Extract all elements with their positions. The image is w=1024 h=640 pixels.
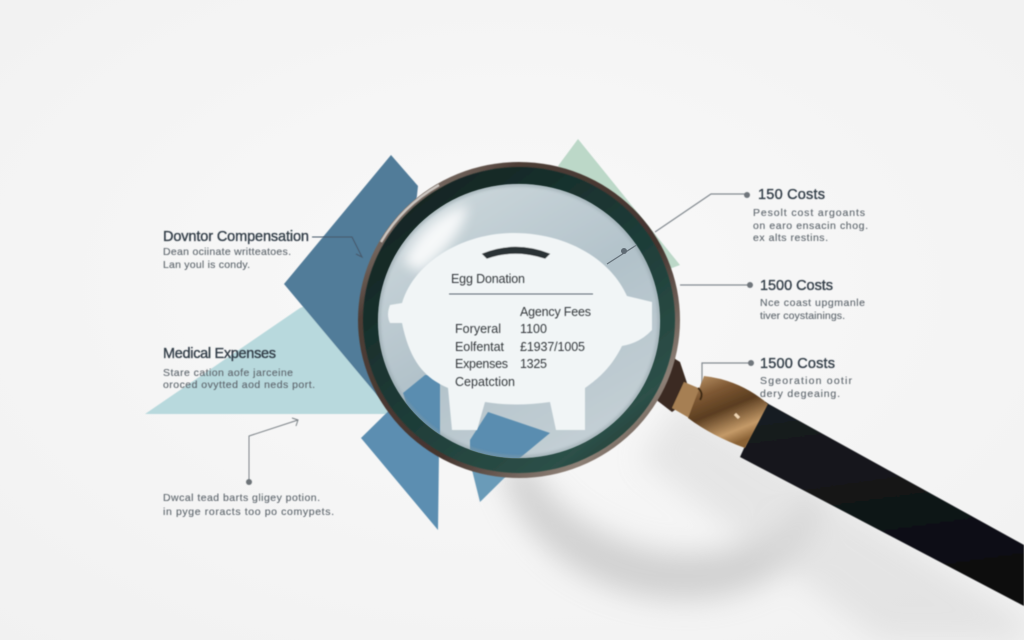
magnifying lens: [358, 162, 680, 478]
table: cost rows: Agency Fees: [520, 305, 591, 319]
outer rim: [358, 162, 680, 478]
highlight: [403, 205, 468, 272]
geometric shapes: [145, 139, 680, 530]
callout: 1500 costs middle: tiver coystainings.: [760, 310, 845, 322]
refracted leader line: [606, 245, 636, 264]
callout: 1500 costs lower: dery degeaing.: [760, 388, 840, 400]
table: cost rows: Eolfentat: [455, 340, 505, 354]
callout: donor compensation: [163, 229, 362, 271]
callout: 150 costs: ex alts restins.: [753, 232, 828, 244]
handle grip: [740, 402, 1024, 606]
refracted shapes: [402, 374, 440, 434]
callout: donor compensation: Dean ociinate writteatoes.: [163, 246, 291, 258]
callout: bottom note: [163, 418, 334, 518]
shape: green triangle: [558, 139, 680, 280]
callout: medical expenses: Stare cation aofe jarceine: [163, 367, 293, 379]
table: cost rows: £1937/1005: [520, 340, 585, 354]
lens label text: [449, 272, 593, 389]
callout: donor compensation: Lan youl is condy.: [163, 259, 250, 271]
callout: donor compensation: Dovntor Compensation: [163, 229, 309, 245]
callout: 1500 costs lower: [702, 356, 852, 400]
pale rim highlight: [381, 185, 439, 242]
callout: 150 costs: on earo ensacin chog.: [753, 220, 868, 232]
table: cost rows: 1100: [520, 322, 547, 336]
callouts left: [163, 229, 362, 518]
callout: 150 costs: [655, 187, 868, 244]
callout: medical expenses: [163, 346, 315, 391]
callout: bottom note: in pyge roracts too po comypets.: [163, 506, 334, 518]
callout: bottom note: Dwcal tead barts gligey potion.: [163, 492, 320, 504]
brass ferrule: [650, 352, 768, 448]
magnifying glass handle: [650, 352, 1024, 606]
glass: [378, 184, 660, 458]
table: cost rows: Foryeral: [455, 322, 501, 336]
inner edge shadow: [379, 185, 659, 457]
callout: 1500 costs middle: Nce coast upgmanle: [760, 297, 865, 309]
shape: dark blue diamond: [284, 155, 418, 407]
table: cost rows: Cepatction: [455, 375, 515, 389]
table: cost rows: [455, 305, 591, 389]
callout: 150 costs: Pesolt cost argoants: [753, 207, 865, 219]
callout: 150 costs: 150 Costs: [758, 187, 825, 203]
lens cast shadow: [500, 400, 1024, 640]
callout: 1500 costs middle: [680, 278, 865, 322]
callout: 1500 costs lower: 1500 Costs: [760, 356, 835, 372]
shape: light teal triangle: [145, 300, 400, 414]
callout: medical expenses: Medical Expenses: [163, 346, 276, 362]
callout: 1500 costs middle: 1500 Costs: [760, 278, 833, 294]
callout: 1500 costs lower: Sgeoration ootir: [760, 375, 852, 387]
piggy bank: [388, 233, 652, 430]
triangle base shadow: [150, 415, 385, 417]
dark green ring: [363, 167, 675, 473]
heading: egg donation: Egg Donation: [451, 272, 525, 286]
callouts right: [655, 187, 868, 400]
table: cost rows: Expenses: [455, 357, 508, 371]
callout: medical expenses: oroced ovytted aod neds port.: [163, 379, 315, 391]
table: cost rows: 1325: [520, 357, 547, 371]
shape: blue lower diamond: [361, 375, 440, 530]
shape: blue lower right quad: [472, 412, 550, 502]
